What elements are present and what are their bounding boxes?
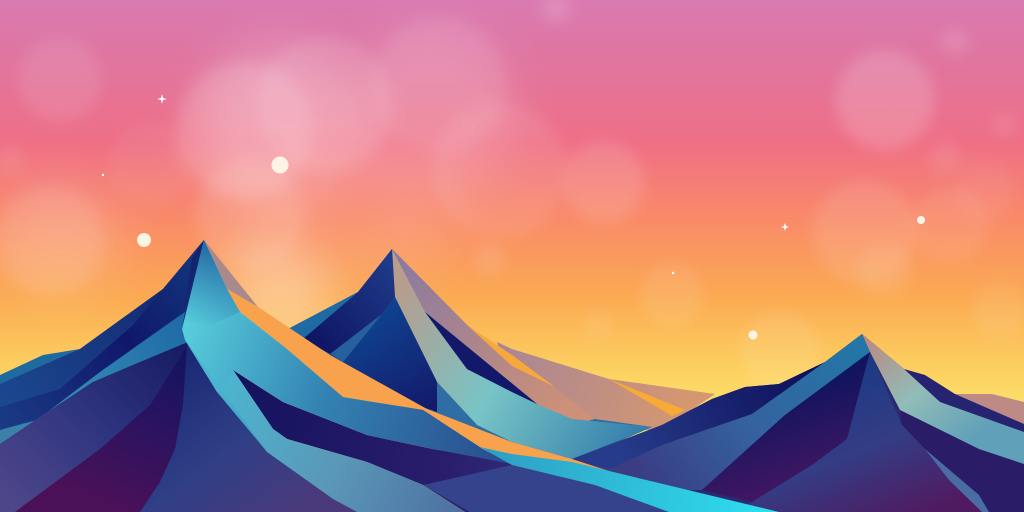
dark right stripe <box>904 369 1024 434</box>
dark facet <box>702 352 870 502</box>
teal ribbon <box>185 340 465 512</box>
navy left face <box>0 240 204 432</box>
peak shading <box>182 240 240 330</box>
dark purple foot <box>15 345 188 512</box>
blue sliver <box>288 292 358 339</box>
dark lower right <box>900 408 1024 512</box>
bokeh circles <box>0 0 1024 390</box>
far right ridge <box>955 394 1024 430</box>
bright ribbon <box>480 447 779 512</box>
left mountain <box>0 240 779 512</box>
small blue facet <box>437 382 477 425</box>
right tan-teal face <box>862 334 1024 464</box>
teal face <box>392 249 652 459</box>
blue band <box>572 334 870 490</box>
tan tip <box>204 240 258 307</box>
dark inset <box>233 370 669 512</box>
stars <box>102 94 925 340</box>
dark stripe <box>425 312 537 404</box>
navy left face <box>303 249 395 354</box>
far back ridge <box>497 342 715 430</box>
slate left slope <box>0 342 188 512</box>
right mountain base fill <box>572 334 1024 512</box>
teal main face <box>182 240 512 464</box>
blue sliver <box>925 449 989 512</box>
large glow clouds <box>0 25 515 345</box>
dark band <box>0 240 204 430</box>
orange streak <box>467 325 555 387</box>
orange streak on back ridge <box>609 379 685 416</box>
central slate <box>140 345 357 512</box>
blue main face <box>330 297 437 412</box>
middle mountain <box>288 249 652 462</box>
middle base fill <box>288 249 652 462</box>
blue band <box>0 312 188 444</box>
center face <box>735 352 989 512</box>
lighter stripe <box>330 314 382 362</box>
right mountain <box>572 334 1024 512</box>
orange band <box>227 289 624 476</box>
dark back facet <box>572 362 825 469</box>
far-left blue slope <box>0 349 80 386</box>
lower slate ribbon <box>423 465 669 512</box>
tan upper face <box>392 249 595 425</box>
left mountain base fill <box>0 240 357 512</box>
